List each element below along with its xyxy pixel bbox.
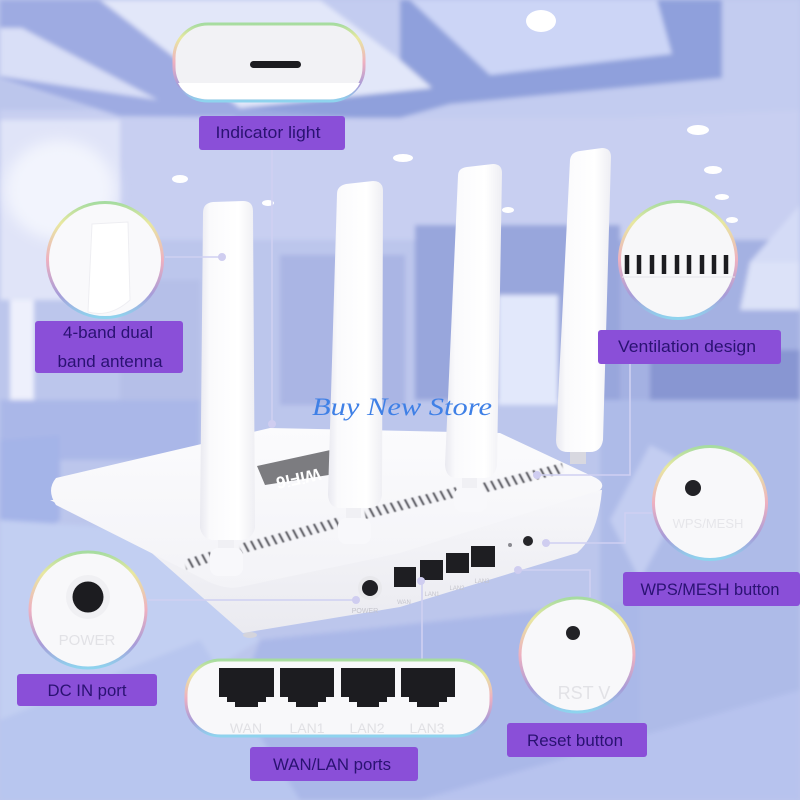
- label: reset: Reset button: [527, 731, 623, 750]
- callout: WPS/MESH: [623, 446, 800, 606]
- power port: POWER: [352, 608, 378, 615]
- label: antenna: band antenna: [58, 352, 163, 371]
- zoom image: WAN/LAN: [186, 660, 491, 736]
- label: WAN/LAN: WAN/LAN ports: [273, 755, 391, 774]
- label: DC IN: DC IN port: [48, 681, 127, 700]
- zoom image: antenna: [48, 202, 162, 318]
- label: WAN/LAN: [250, 747, 418, 781]
- label: WPS/MESH: WPS/MESH button: [640, 580, 780, 599]
- leader dots: [218, 253, 550, 604]
- label: ventilation: [598, 330, 781, 364]
- callout: antenna: [35, 202, 183, 373]
- zoom image: DC IN: POWER: [59, 632, 115, 649]
- zoom image: reset: [520, 598, 634, 712]
- label: DC IN: [17, 674, 157, 706]
- label: antenna: 4-band dual: [63, 323, 153, 342]
- label: WPS/MESH: [623, 572, 800, 606]
- callout: ventilation: [598, 202, 781, 364]
- LAN ports: [394, 546, 495, 606]
- LAN ports: LAN3: [474, 579, 490, 585]
- zoom image: WPS/MESH: WPS/MESH: [673, 516, 743, 531]
- vent slots: [185, 468, 563, 565]
- leader lines: [148, 150, 652, 660]
- buttons: [508, 536, 533, 547]
- router top surface: [51, 428, 602, 588]
- router foot: [243, 632, 257, 638]
- router front face: [50, 490, 602, 633]
- label: antenna: [35, 321, 183, 373]
- label: reset: [507, 723, 647, 757]
- LAN ports: LAN2: [449, 586, 465, 592]
- callout: indicator light: [174, 24, 364, 150]
- antennas: [200, 148, 611, 576]
- antenna 4: [556, 148, 611, 464]
- callout: WAN/LAN: [186, 660, 491, 781]
- LAN ports: WAN: [397, 600, 411, 606]
- LAN ports: LAN1: [424, 592, 440, 598]
- callout: DC IN: [17, 552, 157, 706]
- label: ventilation: Ventilation design: [618, 337, 756, 356]
- WiFi6 badge: [257, 449, 335, 492]
- label: indicator light: [199, 116, 345, 150]
- antenna 1: [200, 201, 255, 576]
- zoom image: WAN/LAN: LAN3: [409, 720, 445, 736]
- router: [50, 428, 602, 638]
- label: indicator light: Indicator light: [216, 123, 321, 142]
- zoom image: ventilation: [620, 202, 736, 318]
- zoom image: WAN/LAN: WAN: [230, 720, 262, 736]
- antenna 2: [328, 181, 383, 544]
- callout: reset: [507, 598, 647, 757]
- power port: [352, 576, 382, 615]
- antenna 3: [445, 164, 502, 512]
- zoom image: reset: RST V: [558, 683, 610, 703]
- zoom image: WPS/MESH: [654, 446, 766, 560]
- WiFi6 badge: WiFi6: [274, 464, 322, 492]
- zoom image: indicator light: [174, 24, 364, 101]
- watermark: Buy New Store: [312, 394, 492, 421]
- zoom image: DC IN: [30, 552, 146, 668]
- zoom image: WAN/LAN: LAN1: [289, 720, 325, 736]
- zoom image: WAN/LAN: LAN2: [349, 720, 385, 736]
